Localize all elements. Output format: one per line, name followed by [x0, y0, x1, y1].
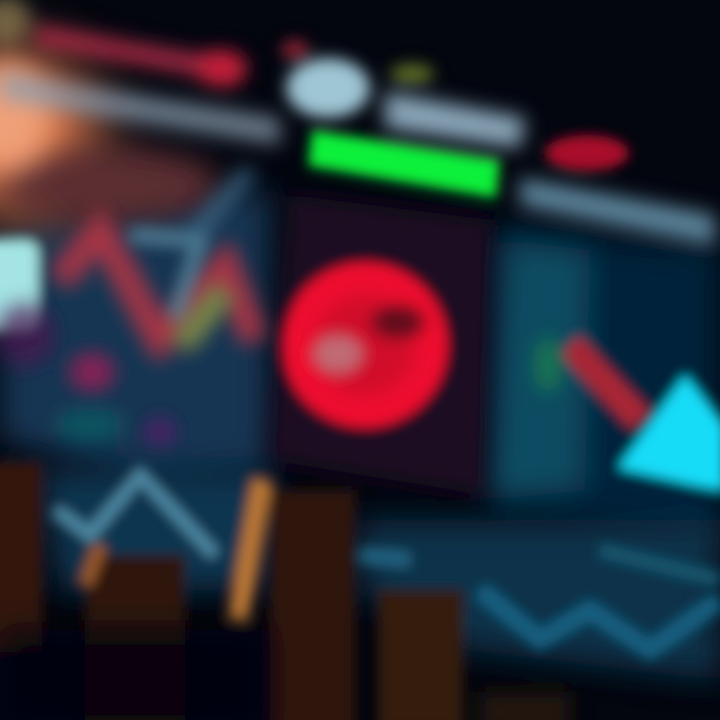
left line chart — [0, 170, 255, 446]
green bar — [308, 130, 500, 198]
top left heading blur — [0, 0, 280, 145]
blue background panels — [0, 190, 720, 680]
orange glow top left — [0, 55, 220, 223]
top centre label blur — [281, 40, 525, 148]
right heading blur — [520, 178, 715, 245]
right arrow and triangle — [536, 337, 720, 492]
red label top right — [545, 135, 629, 171]
bottom brown bars — [0, 462, 570, 720]
red circular icon — [283, 263, 447, 427]
central dark panel — [270, 195, 490, 495]
lower blue line chart — [55, 475, 720, 650]
